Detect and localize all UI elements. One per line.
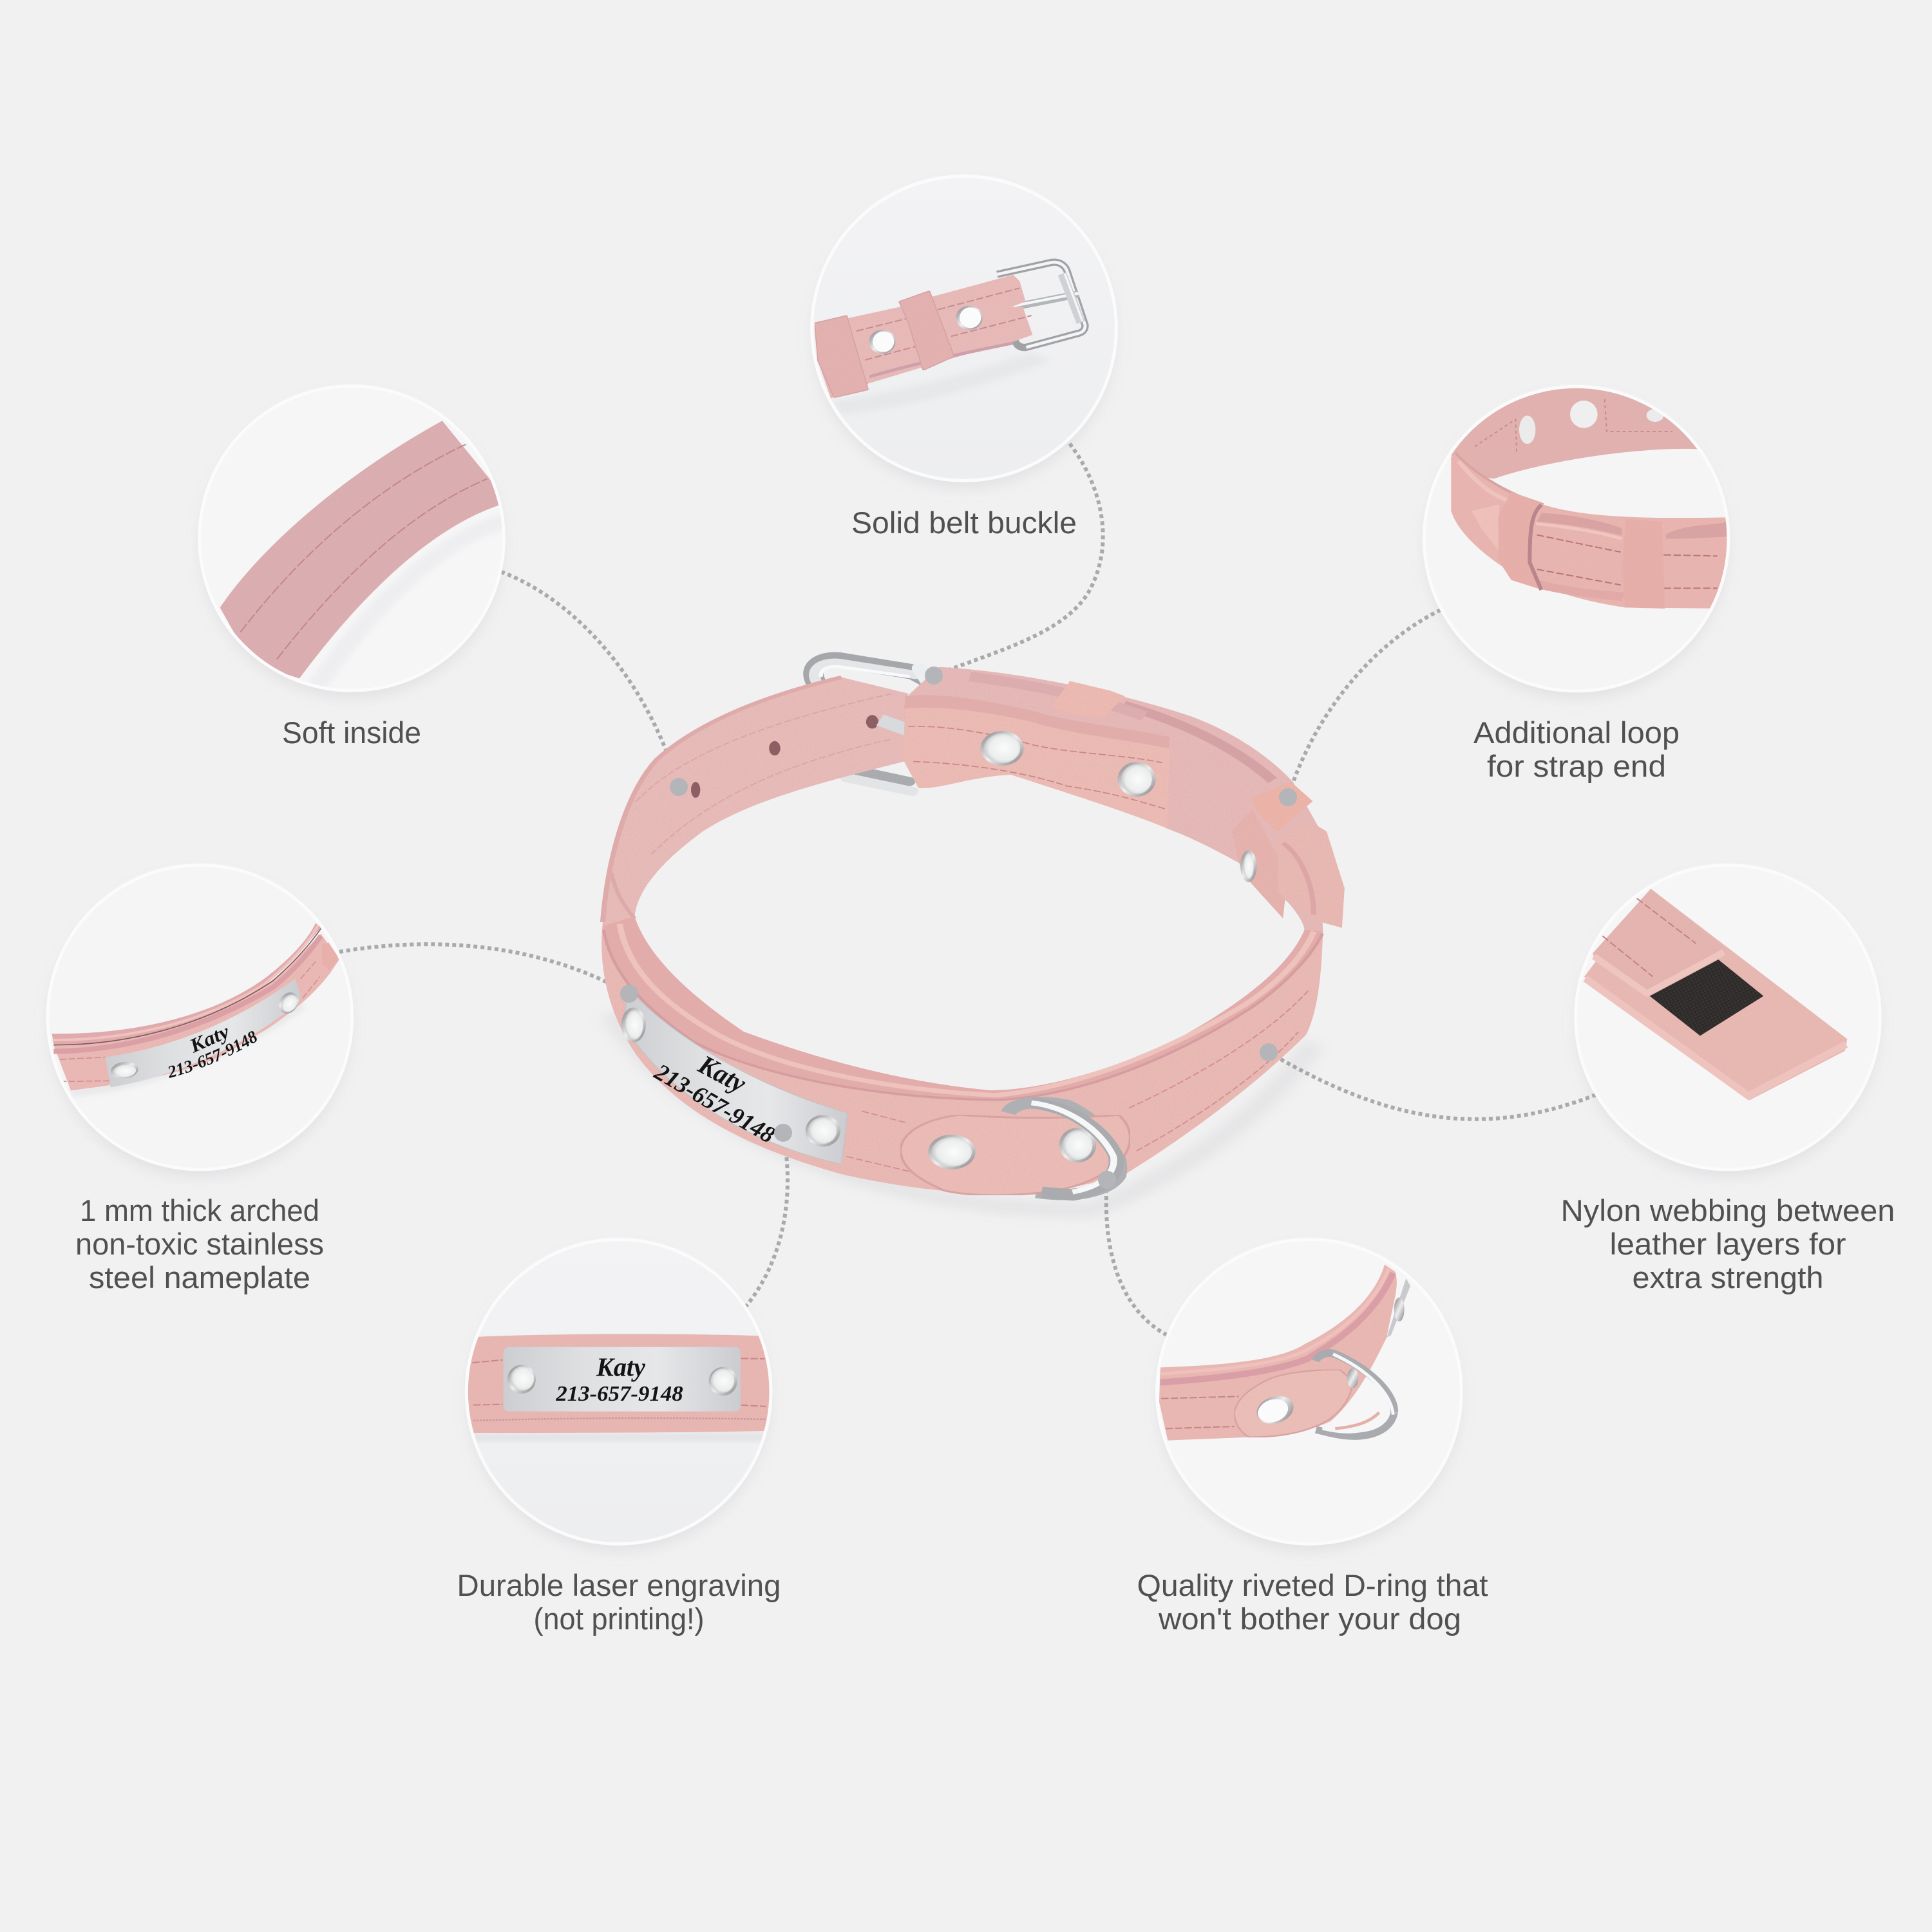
panel: riveted D-ring detail [1157,1240,1461,1551]
caption: nylon webbing: Nylon webbing between [1561,1193,1895,1227]
dotted connector: soft inside [501,572,679,787]
upper strap [52,923,321,1045]
front strap [1451,453,1728,609]
top keeper loop [1052,681,1125,717]
steel plate sliver [1387,1278,1410,1338]
nameplate [621,989,848,1164]
keeper tab [322,942,339,971]
panel: solid belt buckle detail [812,176,1116,488]
callout dots on collar [620,667,1297,1189]
suede back strap right [908,667,1323,934]
caption: additional loop [1473,715,1680,783]
buckle [813,659,939,791]
engraved text on main nameplate: 213-657-9148 [650,1059,779,1149]
strap [815,275,1032,398]
caption: additional loop: for strap end [1487,749,1666,783]
caption: nameplate [75,1193,324,1294]
panel: laser engraving detail: 213-657-9148 [555,1382,683,1406]
dotted connector: D-ring [1106,1180,1167,1335]
strap [1159,1264,1397,1441]
dotted connector: additional loop [1288,610,1441,797]
caption: D-ring: Quality riveted D-ring that [1137,1568,1488,1602]
right loop with strap tail and rivet [1231,782,1345,928]
upper leather layer [1593,889,1725,997]
main collar photo illustration [601,659,1345,1209]
panel: soft inside detail [200,386,509,697]
D-ring back [1316,1412,1394,1436]
caption: laser engraving [457,1568,781,1636]
wavy buckle strap with rivets [903,695,1170,828]
keeper loops [1499,492,1542,589]
panel: arched nameplate detail [46,864,354,1176]
panel: laser engraving detail: Katy [596,1353,645,1383]
engraved text on main nameplate: Katy [693,1050,751,1099]
panel: arched nameplate detail: Katy [185,1020,232,1057]
caption: laser engraving: Durable laser engraving [457,1568,781,1602]
panel: additional loop detail [1424,382,1728,697]
plate [105,979,301,1087]
caption: nylon webbing: leather layers for [1610,1227,1846,1261]
caption: nylon webbing: extra strength [1632,1260,1824,1294]
dotted connector: nylon webbing [1269,1052,1596,1119]
caption: soft inside: Soft inside [282,715,421,750]
lower leather layer [1584,889,1847,1100]
caption: laser engraving: (not printing!) [533,1602,705,1636]
D-ring front [1316,1353,1394,1412]
caption: nameplate: steel nameplate [89,1260,310,1294]
buckle frame [997,262,1085,348]
riveted tab [1235,1370,1352,1437]
dotted connector: nameplate [339,944,629,994]
caption: nylon webbing [1561,1193,1895,1294]
dotted connector: solid belt buckle [934,444,1103,676]
dotted connector: laser engraving [745,1133,788,1307]
front strap [601,916,1323,1195]
caption: D-ring: won't bother your dog [1158,1602,1461,1636]
caption: additional loop: Additional loop [1473,715,1680,750]
suede back with holes [1451,382,1698,478]
panel: laser engraving detail [466,1240,775,1551]
suede strap left with holes and stitching [603,677,929,930]
caption: nameplate: non-toxic stainless [75,1227,324,1261]
caption: nameplate: 1 mm thick arched [80,1193,319,1227]
panel: nylon webbing detail [1576,865,1880,1176]
panel: arched nameplate detail: 213-657-9148 [169,1031,257,1078]
black webbing [1650,960,1763,1036]
front strap [53,934,339,1090]
D-ring and riveted tab [900,1103,1130,1195]
caption: solid belt buckle: Solid belt buckle [851,506,1077,540]
caption: D-ring [1137,1568,1488,1636]
